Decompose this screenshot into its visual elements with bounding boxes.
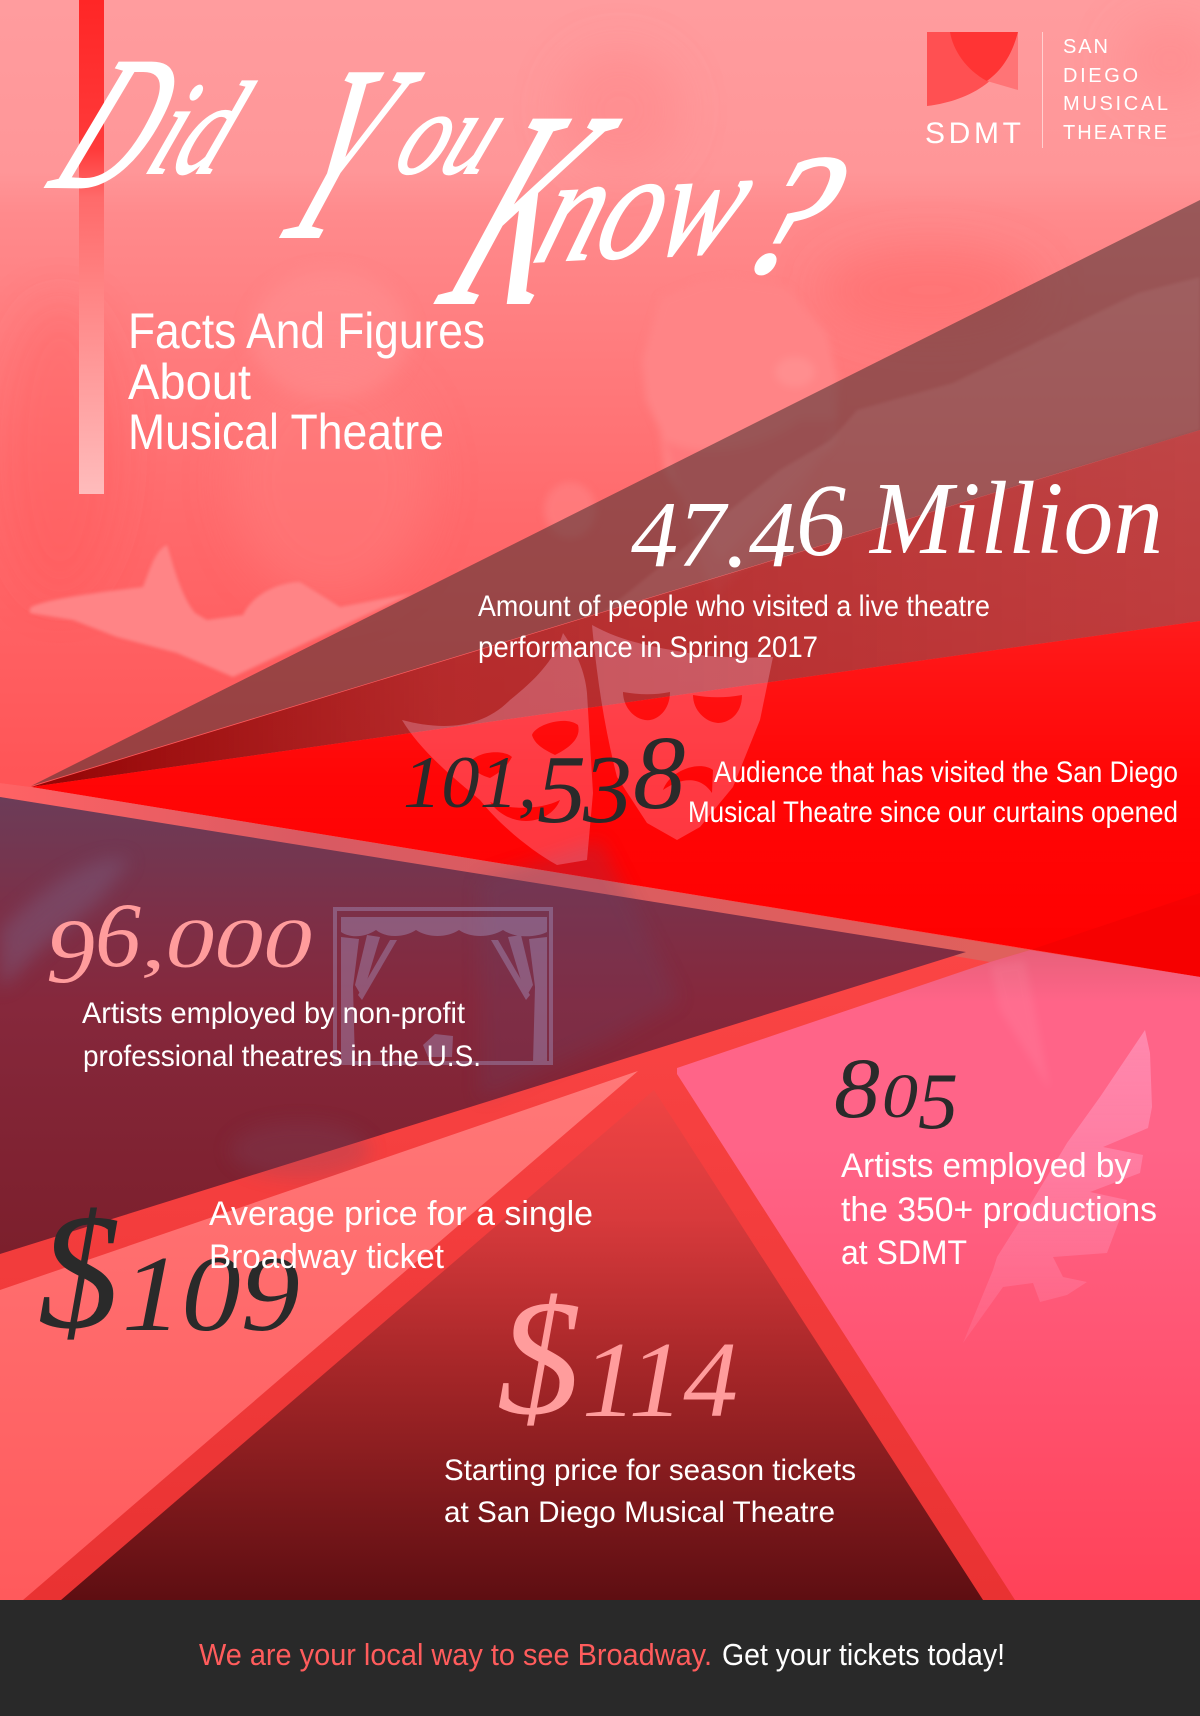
stat: 101,538	[403, 714, 1178, 844]
title: Did You Know?: K	[407, 54, 652, 364]
band: grey translucent fan	[31, 200, 1200, 787]
icon: theatre curtain	[333, 907, 553, 1065]
stat: 805: at SDMT	[841, 1234, 967, 1272]
panel: pink triangle	[677, 950, 1200, 1600]
logo: SDMT: SDMT	[925, 117, 1021, 150]
band: red fan	[31, 621, 1200, 977]
title: Did You Know?: id	[129, 56, 269, 202]
stat: 805: 8	[834, 1040, 880, 1136]
stat: 47.46 Million	[478, 461, 1163, 664]
panel base: red stripes	[0, 783, 1200, 1600]
subtitle: About	[128, 354, 251, 410]
logo: SDMT	[925, 32, 1168, 150]
title: Did You Know?: now	[519, 115, 777, 295]
stat: $114: $	[497, 1266, 581, 1449]
title: Did You Know?: Y	[244, 14, 452, 291]
stat: 96,000: 6	[95, 884, 141, 986]
stat: $109: Average price for a single	[209, 1195, 593, 1233]
logo: SDMT: MUSICAL	[1063, 93, 1168, 115]
stat: 805	[834, 1040, 1157, 1272]
logo: SDMT: DIEGO	[1063, 65, 1138, 87]
stat: 805: 5	[918, 1058, 958, 1146]
logo: SDMT: SAN	[1063, 36, 1108, 58]
footer bar	[0, 1600, 1200, 1716]
title: Did You Know?: D	[24, 19, 212, 229]
subtitle: Musical Theatre	[128, 404, 444, 460]
stat: 805: 0	[882, 1063, 918, 1131]
stat: 101,538: 3	[582, 736, 632, 844]
stat: 101,538: 5	[537, 736, 586, 844]
stat: $109: Broadway ticket	[209, 1238, 445, 1276]
stat: $114: Starting price for season tickets	[444, 1454, 856, 1487]
decorative bar	[79, 0, 104, 494]
stat: 805: Artists employed by	[841, 1147, 1131, 1185]
stat: 47.46 Million: performance in Spring 2017	[478, 631, 818, 664]
stat: $114	[444, 1266, 856, 1529]
background figure head	[250, 270, 410, 400]
logo: SDMT: THEATRE	[1063, 122, 1167, 144]
subtitle	[128, 303, 485, 460]
stat: 47.46 Million: 6	[796, 463, 846, 578]
panel: salmon triangle	[0, 1071, 638, 1600]
stat: 101,538: 101,	[403, 742, 537, 824]
icon: theatre masks	[402, 625, 773, 865]
stat: 47.46 Million: Million	[868, 461, 1163, 576]
stat: 96,000: 9	[46, 900, 95, 1002]
stat: $109	[38, 1180, 593, 1363]
stat: 96,000	[46, 884, 481, 1073]
title: Did You Know?: ou	[379, 68, 529, 199]
title: Did You Know?: ?	[715, 119, 870, 309]
stat: 96,000: ,000	[141, 906, 312, 983]
panel: dark triangle	[0, 797, 966, 1254]
footer bar: Get your tickets today!	[722, 1637, 1005, 1672]
stat: 805: the 350+ productions	[841, 1191, 1157, 1229]
girl head	[642, 278, 838, 600]
footer bar: We are your local way to see Broadway.	[199, 1637, 712, 1672]
stat: 96,000: professional theatres in the U.S.	[83, 1040, 481, 1073]
small raised hand	[544, 482, 596, 538]
title: Did You Know?	[24, 14, 870, 364]
outstretched hand and arm	[30, 545, 413, 677]
stat: 47.46 Million: 47.4	[631, 483, 796, 587]
icon: feather	[963, 1030, 1152, 1343]
stat: $114: at San Diego Musical Theatre	[444, 1496, 835, 1529]
subtitle: Facts And Figures	[128, 303, 485, 359]
stat: $114: 114	[582, 1321, 738, 1440]
stat: $109: $	[38, 1180, 120, 1363]
stat: 101,538: 8	[633, 714, 686, 831]
stat: 96,000: Artists employed by non-profit	[82, 997, 466, 1030]
stat: $109: 109	[122, 1235, 300, 1354]
panel: maroon triangle	[61, 1090, 983, 1600]
stat: 47.46 Million: Amount of people who visited a live theatre	[478, 590, 990, 623]
